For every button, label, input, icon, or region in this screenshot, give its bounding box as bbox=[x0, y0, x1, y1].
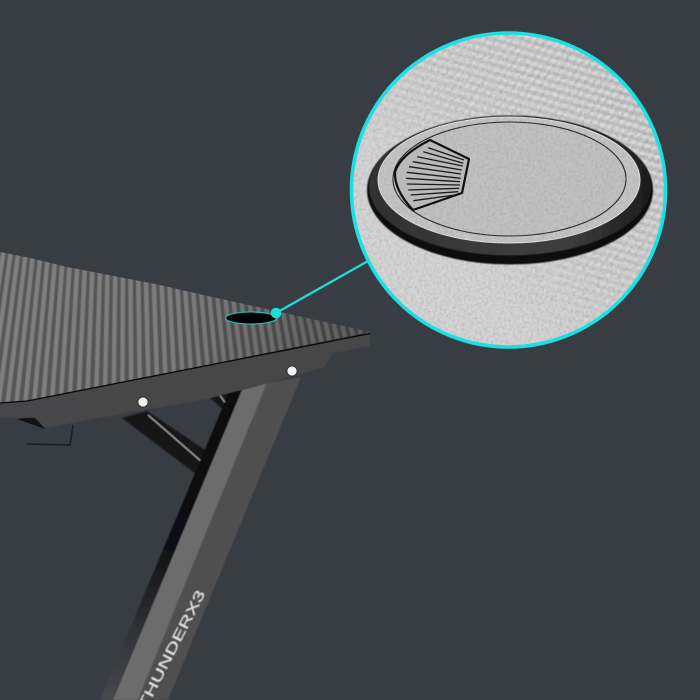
leg black back edge bbox=[100, 390, 242, 700]
carbon fibre desk top bbox=[0, 252, 370, 404]
leg dark face bbox=[138, 377, 301, 700]
cable flap bbox=[395, 140, 469, 210]
callout dot bbox=[271, 308, 281, 318]
under-desk black wedge bbox=[17, 417, 45, 429]
callout cyan border bbox=[352, 33, 666, 347]
desk side edge and apron bbox=[0, 334, 370, 428]
desk frame and leg bbox=[100, 377, 301, 700]
metal grain bbox=[378, 117, 640, 243]
grommet bbox=[367, 116, 653, 264]
screw right bbox=[287, 366, 297, 376]
callout connector line bbox=[271, 261, 368, 318]
lid bbox=[393, 122, 626, 236]
leg light face bbox=[113, 383, 267, 700]
black outer ring bbox=[367, 116, 653, 264]
cross brace bbox=[122, 392, 234, 474]
carbon weave texture bbox=[384, 34, 664, 318]
flap ribs bbox=[406, 148, 464, 201]
desk grommet hole bbox=[226, 312, 276, 324]
hanger hook bbox=[27, 425, 73, 445]
desk front edge line bbox=[0, 334, 370, 403]
silver bezel bbox=[378, 117, 640, 243]
screw left bbox=[138, 397, 148, 407]
zoom callout circle bbox=[350, 31, 668, 349]
